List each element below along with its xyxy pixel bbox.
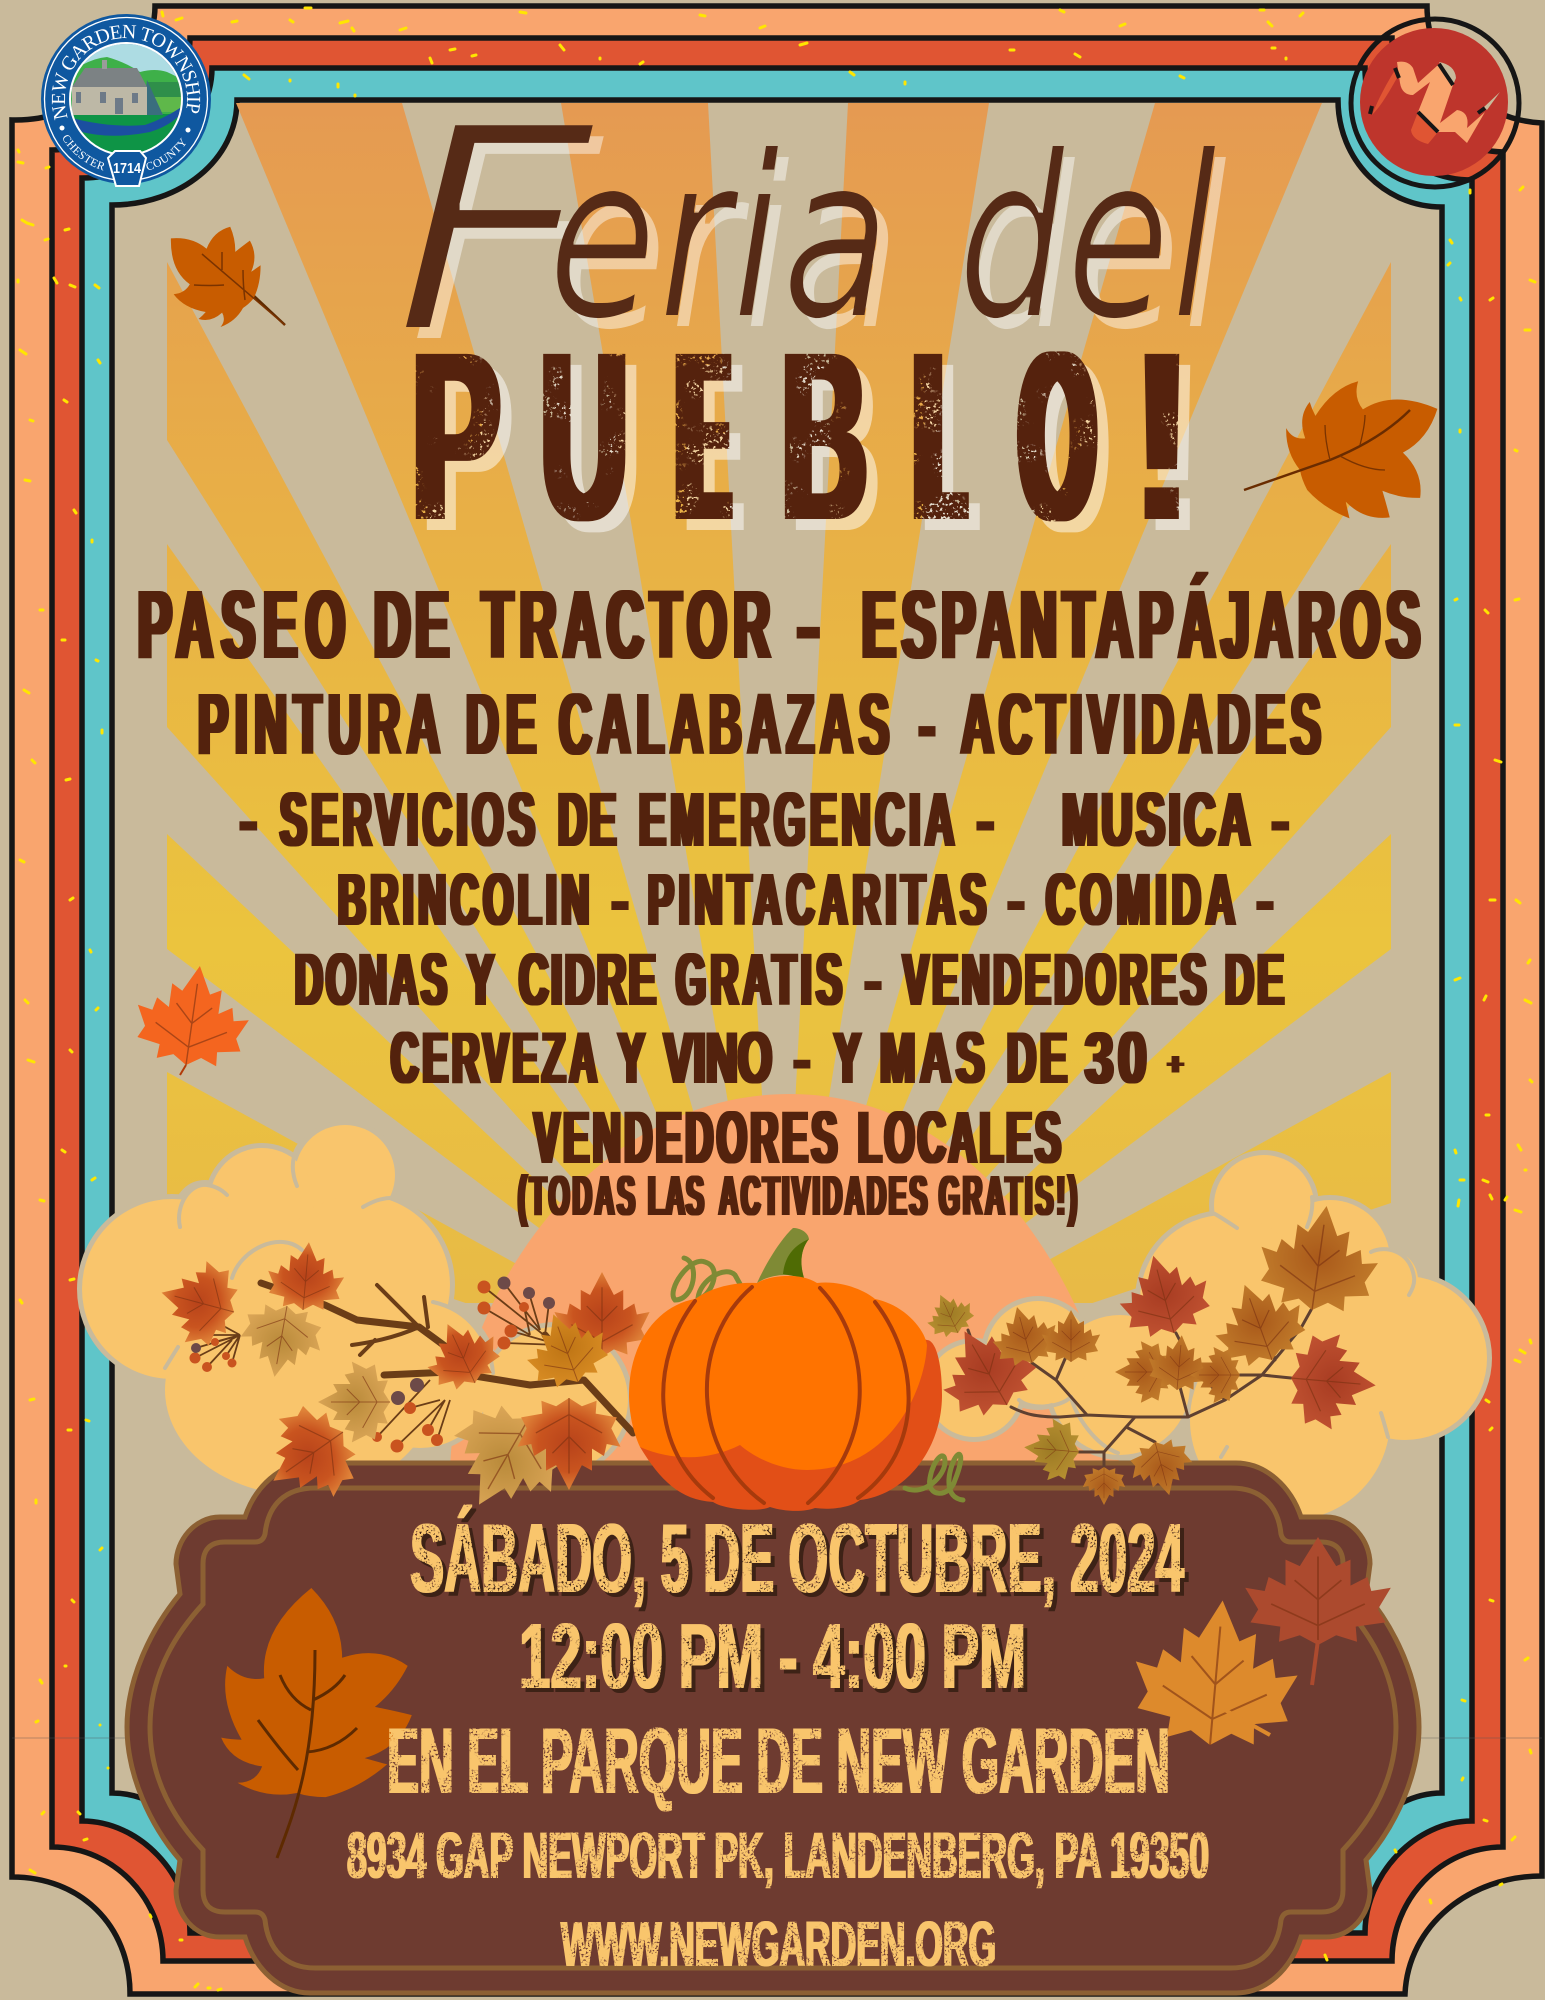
title shadow: eria [558, 119, 902, 381]
activities line 7: VENDEDORES [534, 1098, 837, 1179]
activities note: LAS [648, 1165, 704, 1228]
pueblo letters: P [412, 303, 500, 571]
activities line 3: - [1272, 776, 1289, 863]
activities line 2: CALABAZAS [559, 675, 889, 773]
website: WWW.NEWGARDEN.ORG [561, 1908, 996, 1980]
leaf: orange maple [131, 958, 255, 1075]
title text: del [957, 108, 1218, 370]
logo: New Garden Township seal [41, 14, 211, 187]
pumpkin stem [757, 1228, 809, 1283]
pueblo shadow: P [423, 314, 511, 582]
pueblo letters: L [918, 302, 962, 570]
pueblo letters: E [680, 303, 726, 571]
activities line 5: CIDRE [519, 938, 656, 1021]
activities note: GRATIS!) [939, 1165, 1077, 1228]
activities line 5: DONAS [295, 940, 447, 1021]
activities list [138, 570, 1420, 1228]
pumpkin [629, 1228, 942, 1511]
activities line 3: DE [558, 777, 616, 864]
peach dome [450, 1094, 1120, 1470]
frame inner panel [112, 100, 1442, 1905]
leaves: right branch [919, 1198, 1385, 1505]
autumn branch: left [151, 1239, 650, 1533]
activities line 6: CERVEZA [391, 1018, 597, 1099]
autumn branch: right [919, 1198, 1385, 1505]
pumpkin ribs [663, 1287, 909, 1503]
pueblo shadow: L [929, 313, 973, 581]
activities line 7: LOCALES [858, 1098, 1061, 1179]
time shadow: 12:00 PM - 4:00 PM [523, 1608, 1030, 1712]
activities line 1: TRACTOR [482, 571, 770, 679]
activities line 4 [338, 858, 1273, 942]
title text: F [390, 66, 602, 398]
pueblo letters [412, 302, 1186, 571]
activities line 3: MUSICA [1062, 778, 1250, 863]
activities line 3: - [240, 776, 257, 863]
activities line 1 [138, 570, 1420, 679]
leaf: top right [1244, 351, 1472, 546]
leaves: left branch [151, 1239, 650, 1533]
title shadow: del [968, 119, 1229, 381]
activities line 6: MAS [880, 1017, 984, 1099]
activities line 4: - [612, 860, 628, 942]
activities line 3: SERVICIOS [280, 777, 535, 864]
pueblo letters: O [1020, 302, 1095, 570]
title shadow: F [401, 77, 613, 409]
activities line 6: + [1168, 1047, 1183, 1083]
thin seam line [12, 1737, 1542, 1739]
pueblo shadow: U [552, 314, 639, 582]
activities line 2: DE [466, 675, 536, 773]
event details [347, 1503, 1209, 1980]
activities note: (TODAS [518, 1165, 635, 1228]
leaf: gold plaque leaf [1129, 1593, 1304, 1752]
activities line 5 [295, 938, 1284, 1022]
activities line 6: - [794, 1018, 810, 1100]
activities line 2: PINTURA [198, 675, 440, 773]
activities line 6 [391, 1017, 1183, 1100]
title text: eria [547, 108, 891, 370]
seal dots [60, 126, 191, 132]
activities line 5: DE [1225, 938, 1284, 1021]
title text [390, 66, 1218, 398]
pueblo shadow: E [691, 314, 737, 582]
pueblo letters: ! [1138, 302, 1186, 570]
plaque [127, 1463, 1419, 1993]
logo: MW circle [1351, 19, 1519, 187]
title: Feria del [390, 66, 1229, 409]
activities line 5: - [865, 940, 881, 1022]
activities line 5: VENDEDORES [903, 940, 1206, 1021]
MW mark [1370, 62, 1500, 144]
activities line 2 [198, 675, 1321, 773]
seal county text: COUNTY [146, 138, 186, 170]
plaque inner line [150, 1488, 1396, 1968]
activities line 4: COMIDA [1046, 858, 1235, 941]
title: PUEBLO! [412, 302, 1197, 582]
activities note [518, 1165, 1077, 1228]
activities line 3 [240, 776, 1289, 864]
activities line 1: - [797, 570, 820, 679]
pueblo letters: U [541, 303, 628, 571]
activities line 6: Y [618, 1019, 645, 1099]
activities line 5: GRATIS [676, 940, 842, 1021]
seal top text: NEW GARDEN TOWNSHIP [52, 24, 200, 120]
activities line 4: - [1008, 860, 1024, 942]
seal keystone: 1714 [113, 160, 142, 177]
seal keystone [108, 151, 146, 186]
seal chester text: CHESTER [63, 135, 104, 171]
leaf: top left [143, 201, 285, 338]
plaque outer shape [127, 1463, 1419, 1993]
pueblo shadow [423, 313, 1197, 582]
seal scene [70, 43, 182, 155]
activities line 1: DE [374, 571, 449, 679]
activities line 3: EMERGENCIA [639, 777, 954, 864]
activities line 1: ESPANTAPÁJAROS [862, 570, 1420, 679]
activities line 2: - [919, 675, 935, 773]
pumpkin body [629, 1276, 927, 1470]
leaf: large plaque leaf [221, 1588, 412, 1858]
activities line 7 [534, 1098, 1061, 1179]
pueblo letters: B [782, 303, 867, 571]
pueblo shadow: ! [1149, 313, 1197, 581]
activities line 4: - [1257, 860, 1273, 942]
pueblo shadow: O [1031, 313, 1106, 581]
activities line 5: Y [467, 938, 494, 1021]
seal disc [41, 14, 211, 184]
activities line 6: DE [1007, 1019, 1067, 1099]
pumpkin shadow [640, 1300, 942, 1511]
background sun rays [167, 103, 1391, 1408]
activities line 2: ACTIVIDADES [961, 675, 1321, 773]
activities line 4: PINTACARITAS [648, 860, 986, 941]
vine curl: right [905, 1454, 963, 1500]
activities line 6: Y [834, 1019, 861, 1099]
title shadow [401, 77, 1229, 409]
right cloud [927, 1155, 1487, 1520]
leaf: red plaque leaf [1245, 1537, 1391, 1685]
pueblo shadow: B [793, 314, 878, 582]
activities line 4: BRINCOLIN [338, 860, 589, 941]
vine curl: left [673, 1258, 740, 1300]
activities note: ACTIVIDADES [719, 1165, 927, 1228]
activities line 6: VINO [664, 1018, 772, 1099]
left cloud [82, 1125, 628, 1495]
activities line 6: 30 [1085, 1018, 1147, 1099]
activities line 1: PASEO [138, 571, 345, 679]
activities line 3: - [977, 776, 994, 863]
time: 12:00 PM - 4:00 PM [519, 1604, 1026, 1708]
